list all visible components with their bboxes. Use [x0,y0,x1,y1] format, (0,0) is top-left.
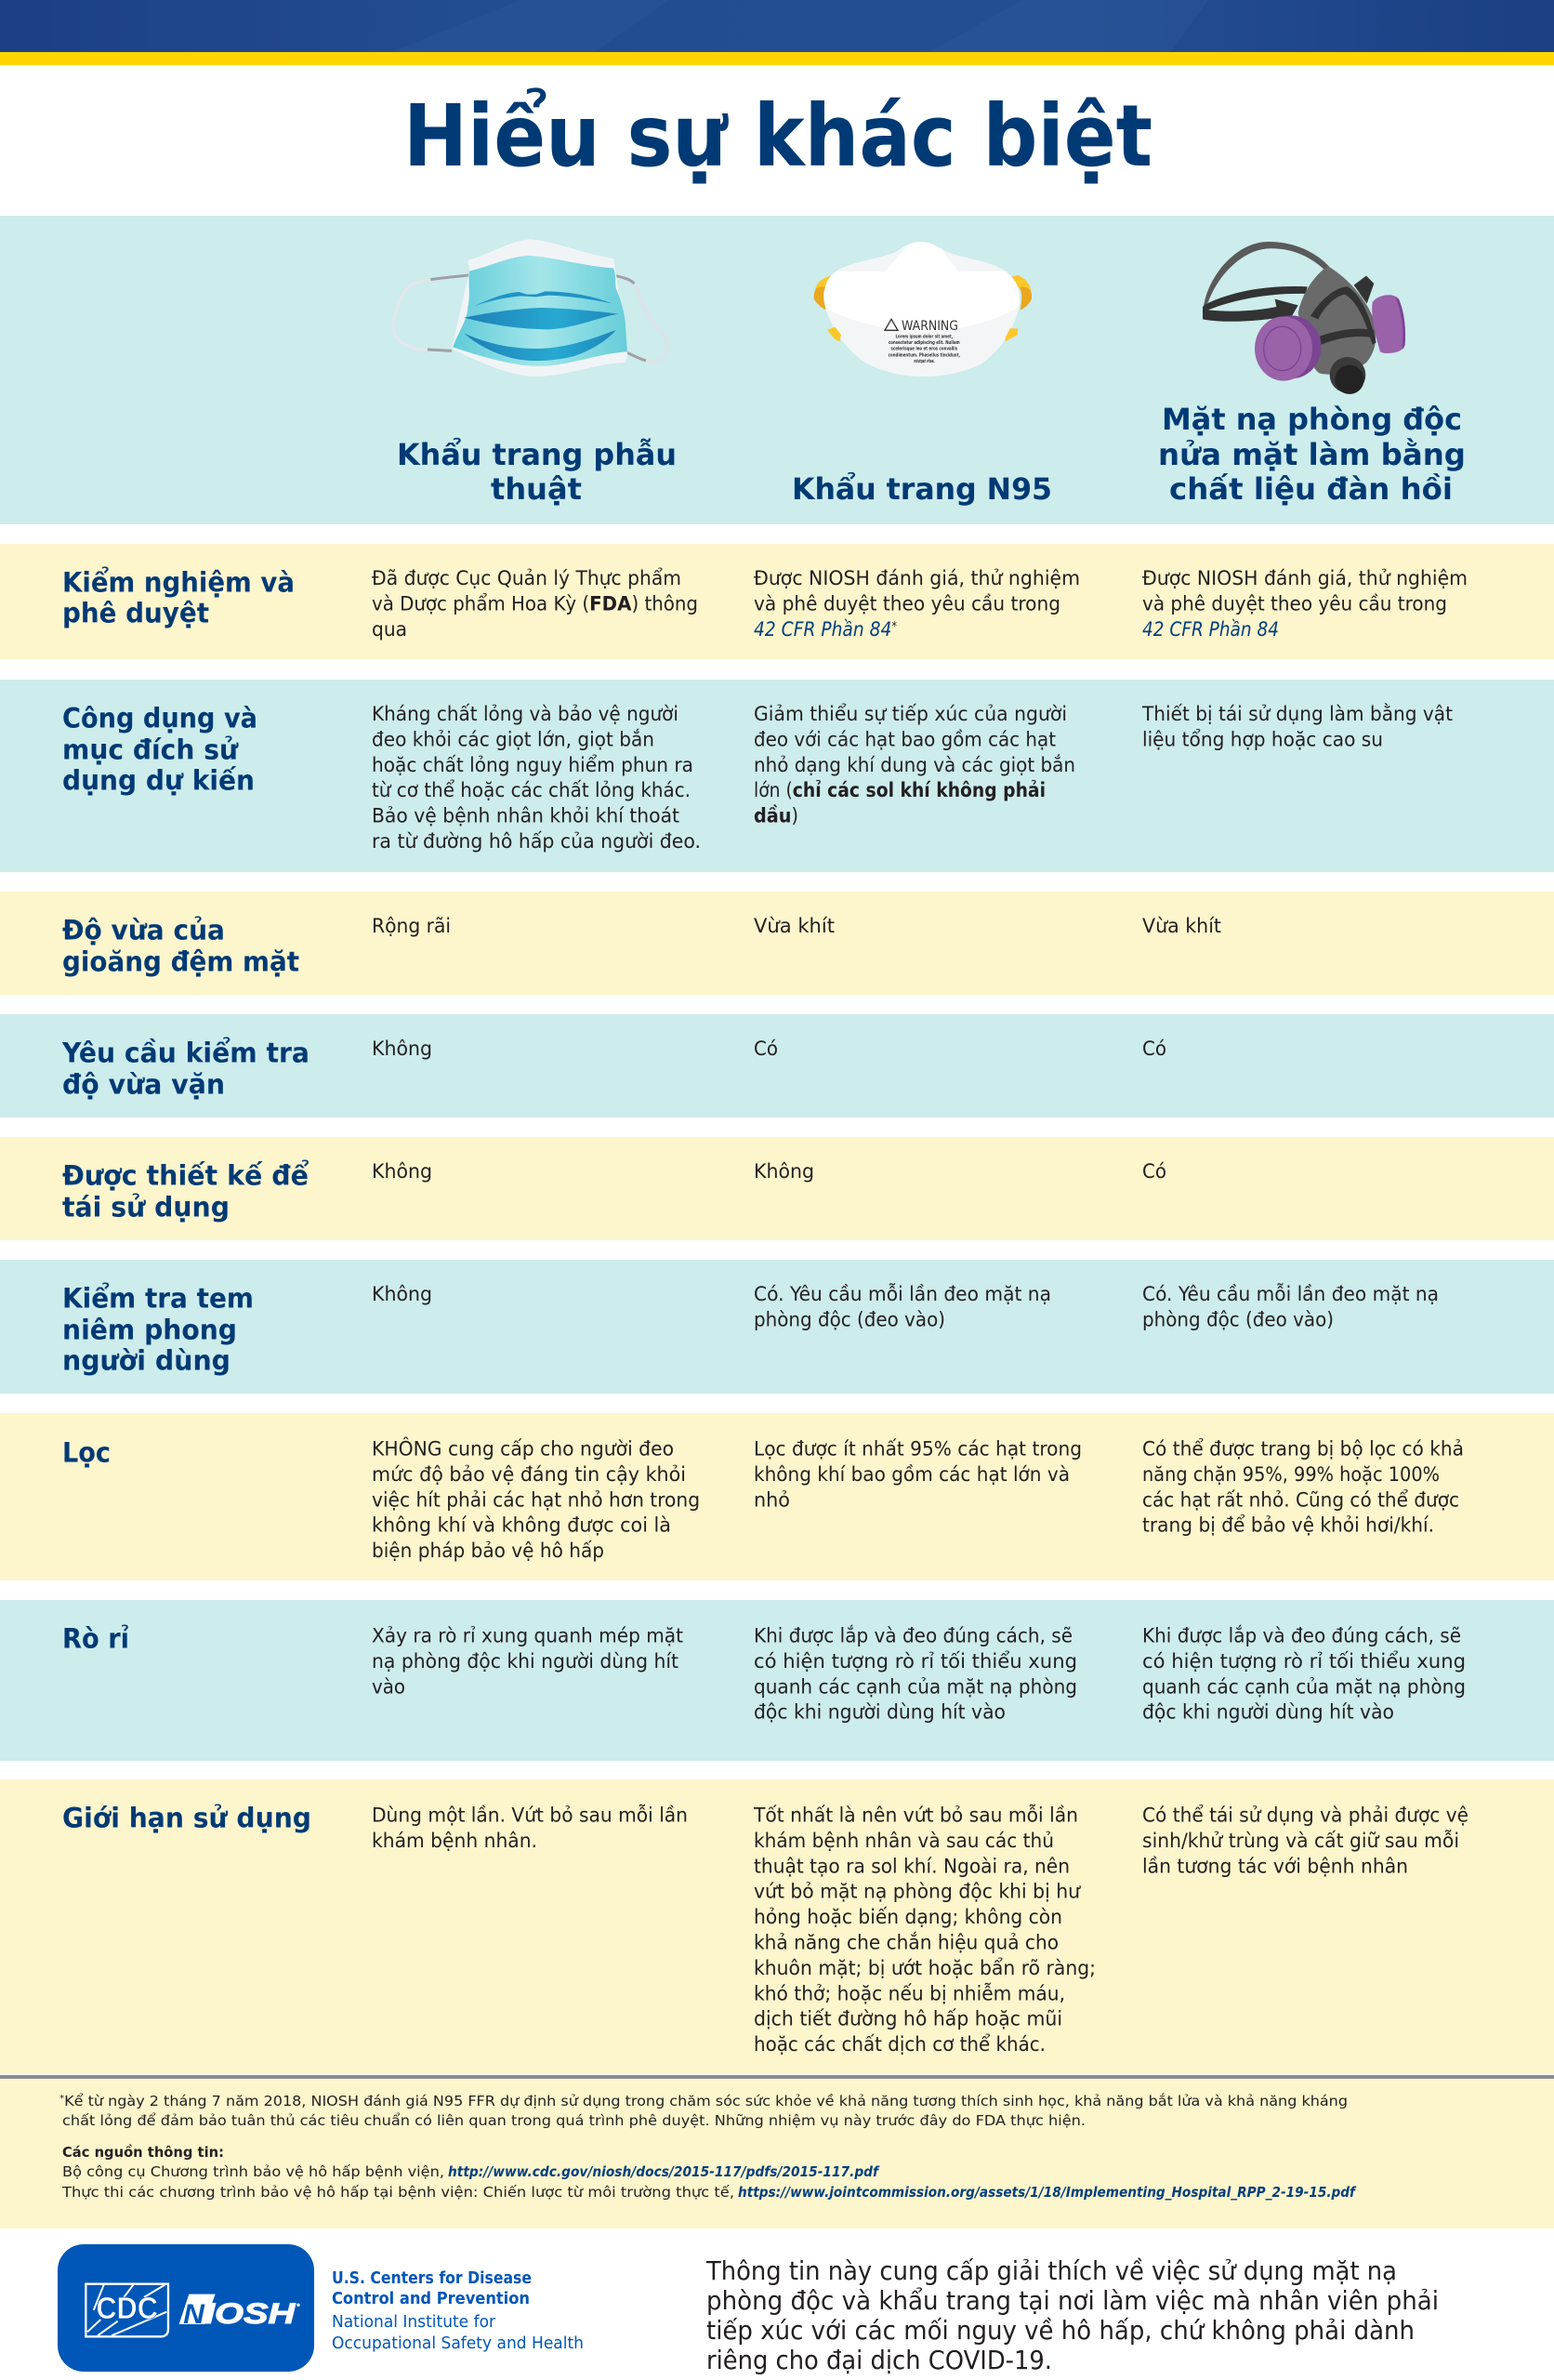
icon: N95 respirator [814,242,1032,377]
surgical mask cell: từ cơ thể hoặc các chất lỏng khác. [372,779,691,802]
surgical mask cell: Bảo vệ bệnh nhân khỏi khí thoát [372,805,679,828]
warning label: WARNING [902,319,958,334]
surgical mask cell: khám bệnh nhân. [372,1830,537,1853]
surgical mask cell [372,1437,700,1563]
panel: column headers [0,216,1554,524]
row label: Kiểm tra tem [62,1283,254,1315]
disclaimer text: tiếp xúc với các mối nguy về hô hấp, chứ không phải dành [706,2315,1415,2346]
elastomeric cell: các hạt rất nhỏ. Cũng có thể được [1142,1488,1459,1512]
N95 cell: hỏng hoặc biến dạng; không còn [754,1906,1062,1929]
elastomeric cell [1142,1804,1468,1878]
sources: Các nguồn thông tin: [62,2143,224,2161]
logo text: Control and Prevention [332,2289,530,2308]
surgical mask cell: Rộng rãi [372,915,451,938]
N95 cell: * [891,620,897,634]
warning label: Lorem ipsum dolor sit amet, [895,334,953,339]
warning label: condimentum. Phasellus tincidunt, [889,352,960,358]
N95 cell: vứt bỏ mặt nạ phòng độc khi bị hư [754,1881,1081,1904]
surgical mask cell: hoặc chất lỏng nguy hiểm phun ra [372,754,693,777]
disclaimer text: phòng độc và khẩu trang tại nơi làm việc mà nhân viên phải [706,2285,1439,2316]
elastomeric cell: quanh các cạnh của mặt nạ phòng [1142,1675,1466,1699]
N95 cell: Được NIOSH đánh giá, thử nghiệm [754,567,1080,590]
footnote: * [59,2094,64,2104]
N95 cell [754,1437,1082,1512]
surgical mask cell: Xảy ra rò rỉ xung quanh mép mặt [372,1625,683,1647]
row label: mục đích sử [62,734,239,766]
N95 cell: Tốt nhất là nên vứt bỏ sau mỗi lần [753,1804,1078,1828]
elastomeric cell [1141,703,1453,751]
N95 cell [753,1804,1096,2056]
logo text: U.S. Centers for Disease [332,2268,532,2288]
header band [0,0,1554,65]
elastomeric cell: 42 CFR Phần 84 [1142,618,1279,641]
logo text: Occupational Safety and Health [332,2334,584,2353]
column heading: surgical mask [397,437,677,507]
surgical mask cell: qua [372,618,407,641]
row label [62,567,295,628]
N95 cell: dầu) [754,805,798,828]
column heading: surgical mask: Khẩu trang phẫu [397,437,677,472]
surgical mask cell: đeo khỏi các giọt lớn, giọt bắn [372,728,654,751]
elastomeric cell: Có thể tái sử dụng và phải được vệ [1142,1804,1468,1828]
row: use limitations [0,1779,1554,2074]
N95 cell: Vừa khít [754,915,835,938]
N95 cell: thuật tạo ra sol khí. Ngoài ra, nên [754,1855,1070,1878]
N95 cell: quanh các cạnh của mặt nạ phòng [754,1675,1077,1699]
logo text [332,2268,584,2353]
N95 cell: độc khi người dùng hít vào [754,1701,1006,1725]
N95 cell [754,1625,1077,1725]
sources: https://www.jointcommission.org/assets/1/18/Implementing_Hospital_RPP_2-19-15.pdf [738,2184,1357,2201]
warning label: volutpat vitae. [914,359,935,364]
N95 cell: không khí bao gồm các hạt lớn và [754,1463,1070,1487]
CDC mark: CDC [96,2292,158,2326]
elastomeric cell: Thiết bị tái sử dụng làm bằng vật [1141,703,1453,726]
footnote: Kể từ ngày 2 tháng 7 năm 2018, NIOSH đánh giá N95 FFR dự định sử dụng trong chăm sóc sức khỏe về khả năng tương thích sinh học, khả năng bắt lửa và khả năng kháng [64,2093,1348,2109]
column heading: elastomeric respirator: chất liệu đàn hồi [1169,471,1453,507]
N95 cell: Khi được lắp và đeo đúng cách, sẽ [754,1625,1073,1647]
surgical mask cell: mức độ bảo vệ đáng tin cậy khỏi [372,1463,686,1487]
surgical mask cell [372,1625,683,1699]
column heading: elastomeric respirator: Mặt nạ phòng độc [1162,402,1462,437]
elastomeric cell: Được NIOSH đánh giá, thử nghiệm [1142,567,1468,590]
elastomeric cell [1142,567,1468,641]
N95 cell: khám bệnh nhân và sau các thủ [754,1830,1054,1853]
row label: Rò rỉ [62,1623,129,1655]
row: intended use [0,680,1554,872]
elastomeric cell: Có [1142,1038,1166,1061]
row: testing and approval [0,544,1554,659]
surgical mask cell: Không [372,1283,432,1306]
row: face seal fit [0,892,1554,995]
footnote: chất lỏng để đảm bảo tuân thủ các tiêu chuẩn có liên quan trong quá trình phê duyệt. Những nhiệm vụ này trước đây do FDA thực hiện. [62,2112,1086,2129]
surgical mask cell: vào [372,1675,405,1699]
row label: Độ vừa của [62,915,225,946]
column heading: surgical mask: thuật [491,471,582,507]
elastomeric cell: phòng độc (đeo vào) [1142,1308,1334,1331]
row: user seal check [0,1260,1554,1394]
icon: surgical mask [393,239,667,377]
disclaimer text [705,2255,1439,2375]
sources: Thực thi các chương trình bảo vệ hô hấp tại bệnh viện: Chiến lược từ môi trường thực tế, [61,2184,734,2201]
row label: phê duyệt [62,597,209,628]
elastomeric cell: năng chặn 95%, 99% hoặc 100% [1142,1463,1440,1487]
elastomeric cell [1142,1625,1466,1725]
surgical mask cell: Không [372,1160,432,1183]
N95 cell: phòng độc (đeo vào) [754,1308,945,1331]
row label: người dùng [62,1344,230,1376]
row label: dụng dự kiến [62,764,255,796]
elastomeric cell: Có thể được trang bị bộ lọc có khả [1142,1437,1464,1461]
warning label: scelerisque leo et eros convallis [890,347,957,352]
CDC mark [86,2284,168,2336]
surgical mask cell: KHÔNG cung cấp cho người đeo [372,1437,674,1461]
N95 cell: Giảm thiểu sự tiếp xúc của người [754,703,1067,726]
row: fit testing requirement [0,1014,1554,1117]
disclaimer text: Thông tin này cung cấp giải thích về việc sử dụng mặt nạ [705,2255,1397,2286]
sources: Bộ công cụ Chương trình bảo vệ hô hấp bệnh viện, [62,2163,444,2180]
elastomeric cell: Vừa khít [1142,915,1221,938]
row: leakage [0,1600,1554,1761]
column heading: elastomeric respirator [1158,402,1466,507]
surgical mask cell: việc hít phải các hạt nhỏ hơn trong [372,1488,700,1512]
surgical mask cell: biện pháp bảo vệ hô hấp [372,1540,604,1563]
row label: Công dụng và [62,703,257,734]
N95 cell: lớn (chỉ các sol khí không phải [754,779,1046,802]
surgical mask cell: ra từ đường hô hấp của người đeo. [372,830,701,853]
elastomeric cell: Khi được lắp và đeo đúng cách, sẽ [1142,1625,1461,1647]
row label: tái sử dụng [62,1192,230,1223]
N95 cell: khả năng che chắn hiệu quả cho [754,1932,1059,1954]
sources [61,2143,1357,2201]
surgical mask cell: Không [372,1038,432,1061]
row label: độ vừa vặn [62,1069,225,1101]
N95 cell [754,1282,1051,1331]
elastomeric cell: Có. Yêu cầu mỗi lần đeo mặt nạ [1142,1282,1439,1306]
surgical mask cell [372,567,698,641]
NIOSH mark: N [183,2299,205,2330]
N95 cell: Có [754,1038,778,1061]
elastomeric cell: Có [1142,1160,1166,1183]
row label [62,1283,254,1376]
disclaimer text: riêng cho đại dịch COVID-19. [706,2345,1052,2375]
N95 cell: Có. Yêu cầu mỗi lần đeo mặt nạ [754,1282,1051,1306]
panel: footnote and sources [0,2075,1554,2228]
column heading: elastomeric respirator: nửa mặt làm bằng [1158,437,1466,472]
logo text: National Institute for [332,2312,496,2332]
column heading: N95: Khẩu trang N95 [792,471,1052,507]
surgical mask cell: Đã được Cục Quản lý Thực phẩm [372,567,681,590]
NIOSH mark: IOSH [204,2297,296,2330]
row label [62,915,299,978]
surgical mask cell: và Dược phẩm Hoa Kỳ (FDA) thông [372,592,698,615]
N95 cell [754,703,1075,828]
N95 cell: Không [754,1160,814,1183]
N95 cell: đeo với các hạt bao gồm các hạt [754,728,1056,751]
N95 cell: khó thở; hoặc nếu bị nhiễm máu, [754,1981,1065,2005]
N95 cell: hoặc các chất dịch cơ thể khác. [754,2033,1046,2056]
N95 cell: Lọc được ít nhất 95% các hạt trong [754,1437,1082,1461]
row label: Lọc [62,1437,111,1469]
row label [62,703,257,796]
surgical mask cell [372,1804,688,1853]
elastomeric cell: có hiện tượng rò rỉ tối thiểu xung [1142,1650,1466,1673]
sources: http://www.cdc.gov/niosh/docs/2015-117/pdfs/2015-117.pdf [448,2163,880,2180]
row label: Được thiết kế để [62,1160,309,1192]
N95 cell: có hiện tượng rò rỉ tối thiểu xung [754,1650,1077,1673]
warning label [885,319,960,364]
row: filtration [0,1413,1554,1580]
surgical mask cell: Dùng một lần. Vứt bỏ sau mỗi lần [372,1804,688,1828]
row: designed for reuse [0,1137,1554,1240]
surgical mask cell [372,703,701,853]
row label: Yêu cầu kiểm tra [61,1038,309,1069]
row label: Kiểm nghiệm và [62,567,295,599]
logo: CDC NIOSH [58,2244,314,2372]
elastomeric cell: và phê duyệt theo yêu cầu trong [1142,592,1447,615]
elastomeric cell: trang bị để bảo vệ khỏi hơi/khí. [1142,1514,1434,1538]
surgical mask cell: Kháng chất lỏng và bảo vệ người [372,703,678,726]
N95 cell [754,567,1080,641]
N95 cell: 42 CFR Phần 84 [754,618,913,641]
N95 cell: dịch tiết đường hô hấp hoặc mũi [754,2008,1062,2031]
surgical mask cell: không khí và không được coi là [372,1514,671,1538]
elastomeric cell: độc khi người dùng hít vào [1142,1701,1394,1725]
row label: Giới hạn sử dụng [62,1802,311,1833]
elastomeric cell: sinh/khử trùng và cất giữ sau mỗi [1142,1829,1459,1853]
warning label: consectetur adipiscing elit. Nullam [889,340,960,346]
row label [61,1038,309,1101]
N95 cell: khuôn mặt; bị ướt hoặc bẩn rõ ràng; [754,1957,1096,1980]
N95 cell: và phê duyệt theo yêu cầu trong [754,592,1060,615]
icon: half-face elastomeric respirator [1203,242,1405,394]
row label [62,1160,309,1223]
title: Hiểu sự khác biệt [403,86,1152,186]
NIOSH mark [179,2294,300,2330]
elastomeric cell [1142,1282,1439,1331]
N95 cell: nhỏ dạng khí dung và các giọt bắn [754,754,1075,777]
N95 cell: nhỏ [754,1488,790,1512]
row label: gioăng đệm mặt [62,946,299,978]
footnote [59,2093,1348,2129]
surgical mask cell: nạ phòng độc khi người dùng hít [372,1650,678,1673]
elastomeric cell [1142,1437,1464,1538]
elastomeric cell: liệu tổng hợp hoặc cao su [1142,728,1383,751]
row label: niêm phong [62,1315,237,1346]
elastomeric cell: lần tương tác với bệnh nhân [1142,1855,1408,1878]
